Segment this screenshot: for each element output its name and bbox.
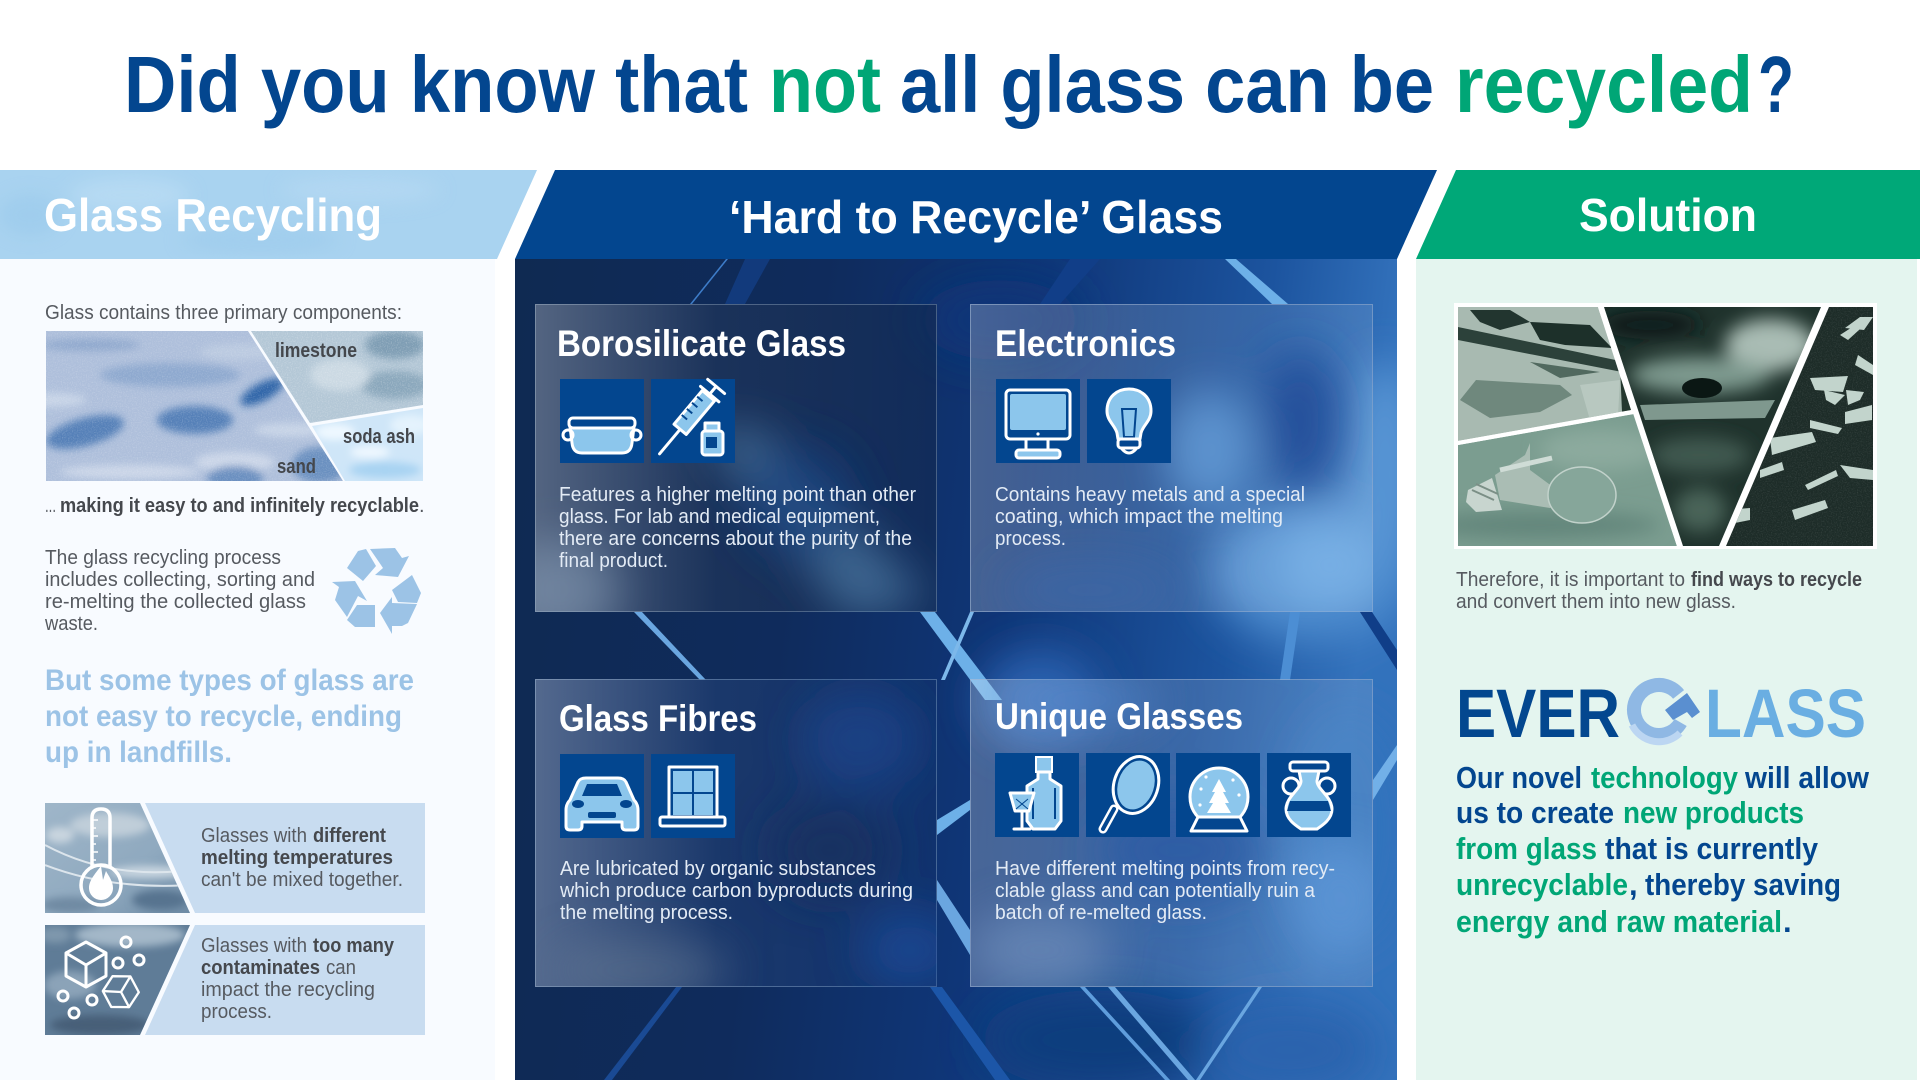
icon: hand mirror (1086, 751, 1170, 837)
text: too many contaminates (201, 935, 395, 1023)
text: unique glasses description: Have different melting points from recy- (995, 858, 1335, 880)
photo: broken light bulb (1458, 414, 1677, 546)
label: limestone: limestone (275, 340, 357, 362)
icon: computer monitor (996, 379, 1080, 463)
icon: vase (1267, 753, 1351, 837)
icon: syringe and vial (650, 379, 735, 463)
text: electronics description: process. (995, 528, 1066, 550)
text: borosilicate description: there are concerns about the purity of the (559, 528, 912, 550)
callout: not easy to recycle: not easy to recycle, ending (45, 700, 402, 733)
photo: shattered window (1458, 307, 1638, 447)
text: glass fibres description: which produce carbon byproducts during (559, 880, 913, 902)
text: borosilicate description: Features a higher melting point than other (559, 484, 916, 506)
text: glass fibres description (559, 858, 913, 924)
text: novel technology statement: technology (1591, 760, 1739, 795)
text: find ways to recycle (1456, 569, 1862, 613)
logo: everglass: EVER (1456, 675, 1620, 752)
text: novel technology statement: Our novel (1456, 760, 1582, 795)
text: infinitely recyclable: ... (45, 495, 56, 517)
text: electronics description: coating, which impact the melting (995, 506, 1283, 528)
text: recycling process: re-melting the collected glass (45, 591, 306, 613)
icon: thermometer (81, 809, 121, 905)
icon: glass dish (560, 379, 644, 463)
text: novel technology statement: from glass (1456, 831, 1597, 866)
label: soda ash: soda ash (343, 426, 415, 448)
main title: recycled (1455, 40, 1753, 129)
photo: sand (46, 331, 343, 481)
heading: borosilicate glass: Borosilicate Glass (557, 323, 846, 364)
heading: glass fibres: Glass Fibres (559, 698, 757, 739)
main title: ? (1758, 40, 1794, 129)
text: novel technology statement: that is currently (1605, 831, 1819, 866)
text: borosilicate description: glass. For lab and medical equipment, (559, 506, 880, 528)
heading: unique glasses: Unique Glasses (995, 696, 1243, 737)
photo: molten glass with thermometer (40, 803, 190, 913)
photo collage: broken glass (1420, 303, 1877, 550)
icon: contaminant cubes and particles (58, 937, 144, 1018)
text: recycling process: includes collecting, sorting and (45, 569, 315, 591)
card: contaminates (39, 923, 425, 1035)
card: glass fibres (535, 679, 960, 1000)
card: melting temperatures (40, 803, 425, 913)
card: unique glasses (970, 670, 1390, 990)
text: novel technology statement: will allow (1744, 760, 1870, 795)
text: borosilicate description (559, 484, 916, 572)
panel: hard to recycle glass (500, 170, 1437, 1080)
callout: not easy to recycle: But some types of glass are (45, 664, 414, 697)
background: blue glass shards (515, 259, 1420, 1080)
header band: hard to recycle: ‘Hard to Recycle’ Glass (729, 191, 1223, 243)
text: glass fibres description: the melting process. (560, 902, 733, 924)
text: too many contaminates: can (326, 957, 356, 979)
text: too many contaminates: contaminates (201, 957, 320, 979)
header band: glass recycling: Glass Recycling (44, 189, 382, 241)
card: borosilicate glass (535, 304, 937, 612)
icon: recycling arrow ring (1625, 676, 1700, 744)
text: infinitely recyclable: making it easy to and infinitely recyclable (60, 495, 419, 517)
text: three components intro: Glass contains three primary components: (45, 302, 402, 324)
text: novel technology statement: unrecyclable (1456, 867, 1628, 902)
text: unique glasses description: batch of re-melted glass. (995, 902, 1207, 924)
icon: car (560, 754, 644, 838)
text: find ways to recycle: Therefore, it is important to (1456, 569, 1685, 591)
photo: soda ash (312, 408, 423, 481)
text: different melting temperatures: melting temperatures (201, 847, 393, 869)
text: novel technology statement: . (1783, 904, 1792, 939)
photo: broken bottle (1600, 307, 1825, 547)
photo: glass shards on asphalt (1720, 307, 1873, 546)
logo: everglass (1456, 675, 1866, 752)
header band: solution: Solution (1579, 189, 1757, 241)
main title (124, 40, 1794, 129)
main title: not (769, 40, 881, 129)
callout: not easy to recycle (45, 664, 414, 769)
text: too many contaminates: too many (313, 935, 395, 957)
text: find ways to recycle: find ways to recycle (1691, 569, 1862, 591)
photo: limestone (250, 331, 429, 426)
icon: light bulb (1087, 379, 1171, 463)
header band: solution (1416, 170, 1920, 259)
text: novel technology statement: thereby saving (1645, 867, 1841, 902)
main title: all glass can be (900, 40, 1434, 129)
header band: hard to recycle (515, 170, 1437, 259)
text: find ways to recycle: and convert them into new glass. (1456, 591, 1736, 613)
logo: everglass: LASS (1705, 675, 1866, 752)
text: glass fibres description: Are lubricated by organic substances (560, 858, 876, 880)
heading: electronics: Electronics (995, 323, 1176, 364)
main title: Did you know that (124, 40, 748, 129)
photo: glass cullet with cubes (39, 923, 190, 1035)
text: unique glasses description (995, 858, 1335, 924)
card: electronics (970, 304, 1385, 620)
text: infinitely recyclable: . (419, 495, 425, 517)
text: different melting temperatures: Glasses with (201, 825, 307, 847)
text: novel technology statement: us to create (1456, 795, 1614, 830)
icon: recycling symbol (332, 548, 421, 634)
text: unique glasses description: clable glass and can potentially ruin a (995, 880, 1316, 902)
text: different melting temperatures (201, 825, 403, 891)
icon: window (651, 754, 735, 838)
text: too many contaminates: impact the recycling (201, 979, 375, 1001)
icon: snow globe (1176, 753, 1260, 837)
text: recycling process (44, 547, 315, 635)
text: novel technology statement: , (1629, 867, 1638, 902)
panel: glass recycling (0, 170, 537, 1080)
text: borosilicate description: final product. (559, 550, 668, 572)
callout: not easy to recycle: up in landfills. (45, 736, 232, 769)
photo collage: sand, limestone, soda ash (46, 331, 423, 481)
label: sand: sand (277, 456, 316, 478)
text: electronics description (995, 484, 1305, 550)
text: recycling process: waste. (44, 613, 98, 635)
header band: glass recycling (0, 170, 537, 259)
decorative white dividers (1458, 307, 1825, 546)
icon: decanter and wine glass (995, 753, 1079, 837)
text: different melting temperatures: can't be mixed together. (201, 869, 403, 891)
text: electronics description: Contains heavy metals and a special (995, 484, 1305, 506)
text: too many contaminates: Glasses with (201, 935, 307, 957)
text: different melting temperatures: different (313, 825, 386, 847)
text: too many contaminates: process. (201, 1001, 272, 1023)
text: novel technology statement: energy and raw material (1456, 904, 1782, 939)
text: novel technology statement: new products (1623, 795, 1804, 830)
text: recycling process: The glass recycling process (45, 547, 281, 569)
text: novel technology statement (1456, 760, 1870, 939)
panel: solution (1416, 170, 1920, 1080)
